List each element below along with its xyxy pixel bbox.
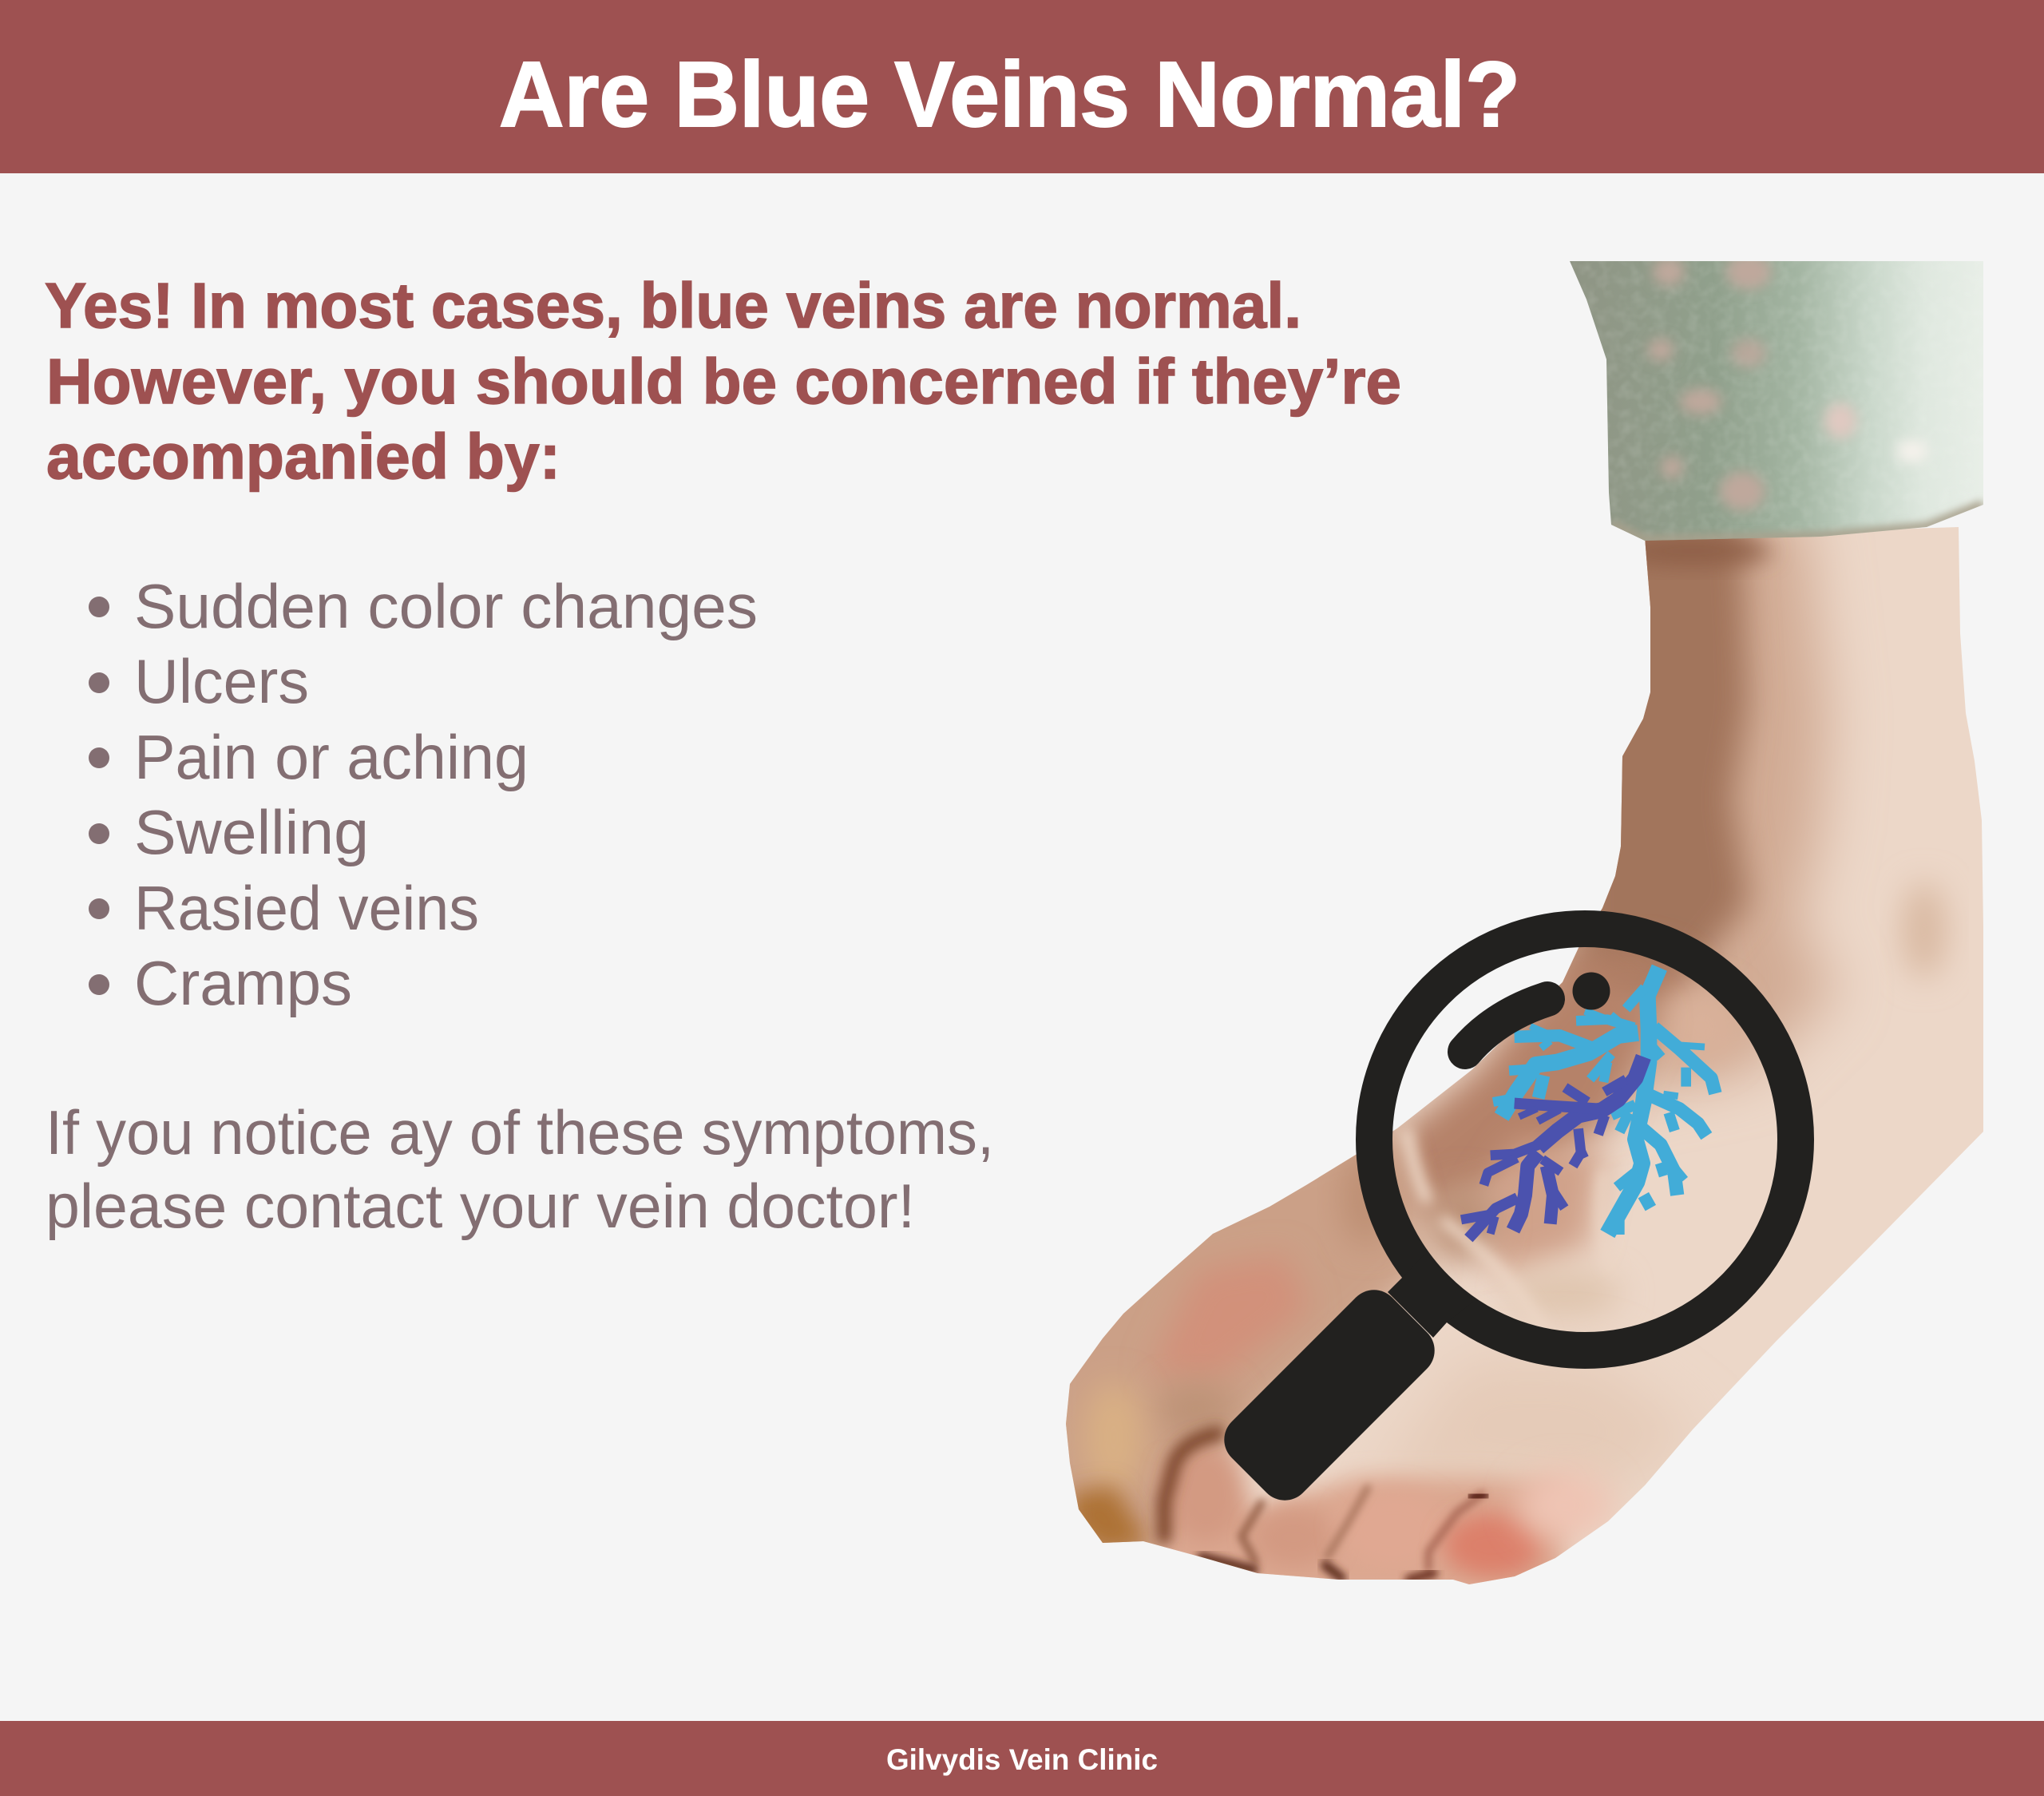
title: Are Blue Veins Normal? xyxy=(499,42,1520,146)
symptoms bullet list: Pain or aching xyxy=(134,722,529,792)
closing advice text xyxy=(46,1097,994,1241)
symptoms bullet list: Sudden color changes xyxy=(134,571,758,641)
ankle shading xyxy=(1517,511,1947,1118)
header banner xyxy=(0,0,2044,173)
closing advice text: If you notice ay of these symptoms, xyxy=(46,1097,994,1168)
foot illustration xyxy=(1066,261,1983,1584)
midfoot light area xyxy=(1399,1358,1674,1482)
lead text block xyxy=(45,270,1401,492)
toe creases xyxy=(1164,1433,1483,1580)
symptoms bullet list: Rasied veins xyxy=(134,873,479,943)
footer banner xyxy=(0,1721,2044,1796)
symptoms bullet list: Swelling xyxy=(134,797,369,867)
lead text block: Yes! In most cases, blue veins are normal. xyxy=(45,270,1301,341)
toes base xyxy=(1161,1445,1608,1584)
icon: magnifying glass xyxy=(1214,929,1796,1511)
symptoms bullet list: Cramps xyxy=(134,948,352,1018)
tendon ridges xyxy=(1396,1125,1606,1294)
lens area shading xyxy=(1389,946,1741,1318)
footer clinic name: Gilvydis Vein Clinic xyxy=(886,1743,1158,1776)
icon: vein network, light blue branches xyxy=(1493,968,1715,1235)
sock cuff xyxy=(1565,254,1988,551)
symptoms bullet list: Ulcers xyxy=(134,646,309,716)
closing advice text: please contact your vein doctor! xyxy=(46,1171,915,1241)
forefoot shading xyxy=(1066,1128,1438,1552)
lead text block: However, you should be concerned if they’re xyxy=(46,346,1401,417)
symptoms bullet list xyxy=(89,571,758,1018)
lead text block: accompanied by: xyxy=(46,421,561,492)
icon: vein network, dark blue branches xyxy=(1461,1057,1643,1239)
